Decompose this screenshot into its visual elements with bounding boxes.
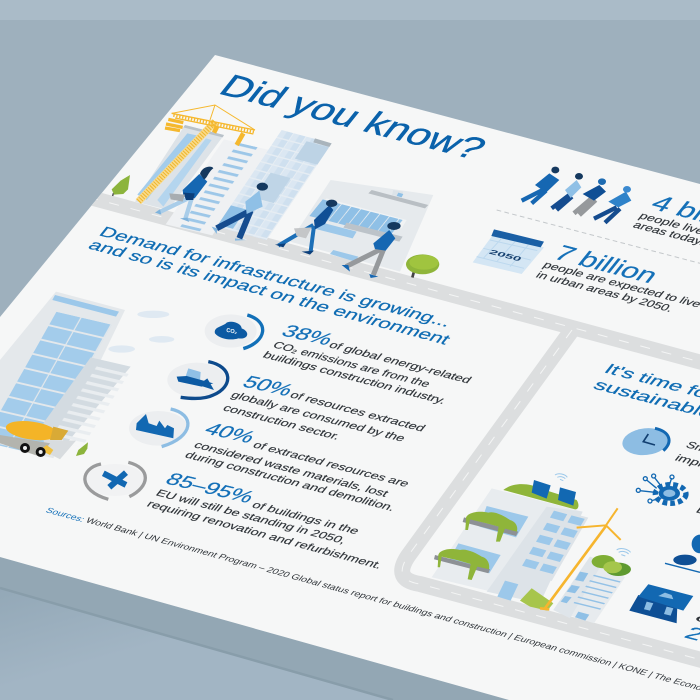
stat: 40% [183, 420, 412, 513]
stat: 85-95%: of buildings in the [250, 500, 362, 536]
main green building [432, 488, 588, 603]
dashed divider [497, 210, 700, 263]
small green building [553, 555, 631, 623]
heading: demand for infrastructure: Demand for infrastructure is growing... [96, 224, 455, 330]
side block [43, 357, 131, 448]
stat: 40%: during construction and demolition. [183, 450, 398, 513]
icon: tools ring [85, 462, 145, 499]
illustration: tall building, truck and icons [0, 292, 263, 499]
small leaf [76, 442, 88, 456]
icon: clock [621, 426, 670, 457]
stat: 50% [221, 373, 428, 444]
person: woman in grey trousers [342, 222, 401, 278]
illustration: sustainable buildings [432, 426, 700, 623]
stat: 7 billion: in urban areas by 2050. [534, 270, 676, 314]
man 1 [522, 167, 559, 203]
icon: CO2 ring [205, 314, 263, 349]
building under crane [135, 125, 224, 210]
hill [520, 588, 553, 611]
man 3 [574, 178, 606, 215]
stat: 50%: of resources extracted [288, 390, 428, 433]
stat: 85-95% [145, 470, 385, 571]
person: man walking [212, 183, 268, 241]
illustration: city scene with people [112, 105, 439, 278]
icon: house [629, 584, 693, 623]
stat: 85-95%: 85–95% [161, 470, 259, 507]
sources line: Sources: [44, 506, 86, 524]
stat: 38%: 38% [277, 322, 338, 349]
striped office building [166, 139, 271, 235]
tall glass building [0, 292, 125, 463]
stat: 38%: of global energy-related [327, 340, 474, 385]
wifi signals [555, 474, 631, 556]
tree left [112, 175, 130, 196]
stat: 38% [261, 322, 474, 406]
construction crane [138, 105, 255, 202]
person: woman with handbag [275, 200, 337, 255]
man 2 [552, 173, 583, 210]
stat: 85-95%: EU will still be standing in 2050, [154, 488, 349, 546]
icon: digital gear [636, 474, 686, 503]
icon: factory ring [129, 409, 188, 447]
road network [88, 197, 700, 665]
tree right [406, 254, 439, 278]
stat: 4 billion [631, 191, 700, 250]
glass tower [217, 130, 332, 240]
green roof [503, 484, 578, 509]
wind turbine [540, 508, 621, 609]
man 4 [594, 186, 631, 223]
calendar icon [473, 229, 544, 274]
stat: 40%: of extracted resources are [251, 440, 412, 489]
icon: bulb with plant [665, 535, 700, 572]
green balconies [434, 512, 518, 580]
stat: 7 billion: 7 billion [549, 241, 664, 288]
stat: 50%: globally are consumed by the [229, 390, 408, 444]
stat: 40%: 40% [200, 420, 260, 447]
stat: 38%: buildings construction industry. [261, 350, 449, 406]
icon: CO2 ring: CO₂ [226, 328, 238, 336]
smog clouds [108, 311, 174, 353]
heading: demand for infrastructure: and so is its impact on the environment [85, 237, 454, 348]
calendar icon: 2050 [487, 248, 523, 263]
stat: 38%: CO₂ emissions are from the [271, 340, 433, 389]
stat: 7 billion [534, 241, 700, 314]
stat: 50%: 50% [238, 373, 298, 400]
concrete mixer truck [0, 418, 76, 459]
low building [290, 180, 433, 272]
stat: 85-95%: requiring renovation and refurbishment. [145, 499, 385, 571]
stat: 50%: construction sector. [221, 403, 343, 442]
person: woman with briefcase [155, 167, 213, 222]
solar panels [532, 480, 576, 506]
title: Did you know? [212, 69, 493, 166]
illustration: four men and calendar [473, 167, 700, 274]
stat: 40%: considered waste materials, lost [192, 440, 391, 499]
icon: bulldozer ring [167, 362, 228, 399]
right panel text fragments [673, 440, 700, 649]
